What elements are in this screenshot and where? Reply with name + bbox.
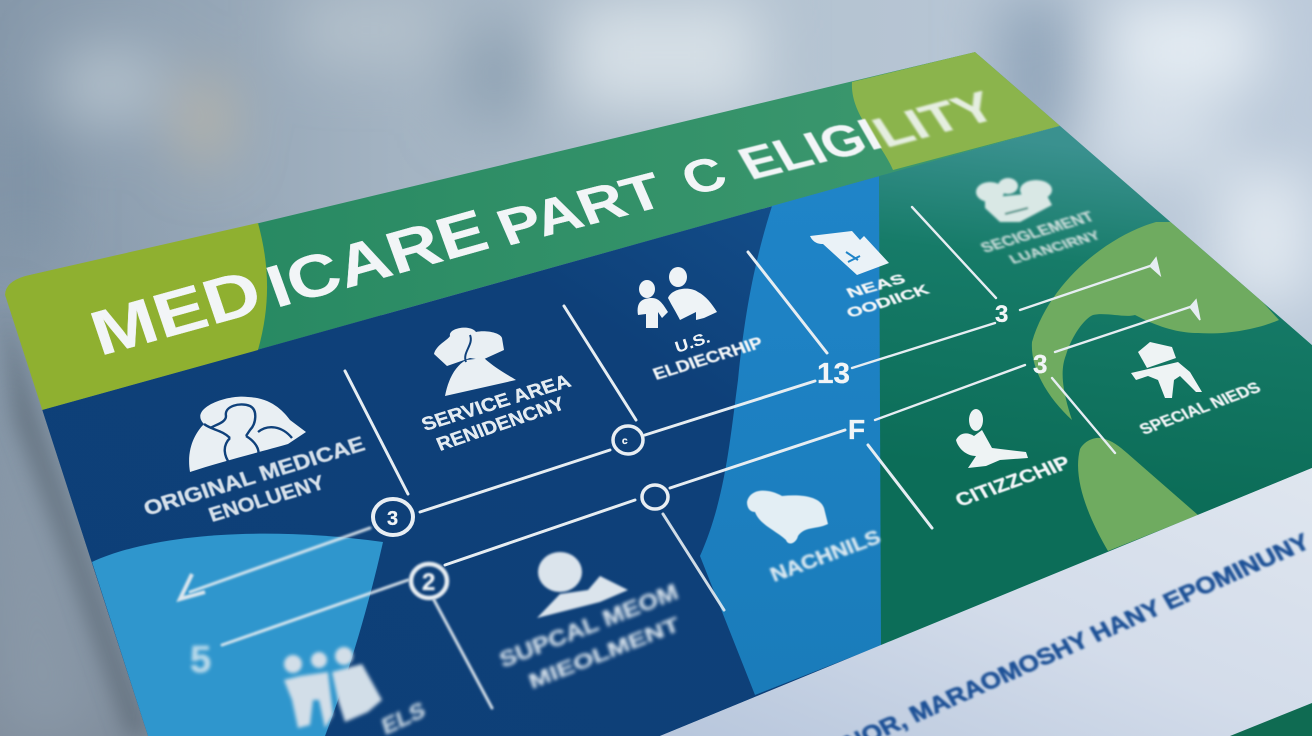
labels: SUPCAL MEOM xyxy=(496,579,681,673)
panel: green section xyxy=(879,125,1312,646)
labels: SPECIAL NIEDS xyxy=(1136,378,1264,438)
card shadow xyxy=(2,300,150,736)
labels: CITIZZCHIP xyxy=(952,453,1075,511)
icon: head and shoulders xyxy=(537,552,628,618)
grid lines xyxy=(190,207,1190,708)
icon: two people U.S. xyxy=(638,267,717,328)
panel: bottom white strip xyxy=(660,468,1312,736)
icon: group top right xyxy=(976,178,1052,222)
title: MED xyxy=(82,257,270,369)
icon: original medicare person xyxy=(189,397,306,472)
node numbers: 3 xyxy=(387,508,398,530)
panel: bright blue section xyxy=(700,176,882,695)
panel: lime header corner right xyxy=(852,52,1063,170)
labels: ENOLUENY xyxy=(206,472,328,527)
node numbers: 2 xyxy=(422,569,435,596)
panel: light green arc xyxy=(1032,222,1279,420)
arrow head xyxy=(180,574,205,599)
labels: RENIDENCNY xyxy=(434,394,568,456)
icon: special needs xyxy=(1131,342,1202,398)
labels: MIEOLMENT xyxy=(526,613,683,694)
labels: OODIICK xyxy=(844,281,932,321)
title xyxy=(82,82,1006,369)
panel: light blue shape xyxy=(92,534,383,736)
panel: light green lower blob xyxy=(1078,438,1198,551)
node numbers: 13 xyxy=(817,358,850,390)
title: C xyxy=(673,147,735,206)
icon: blue hands xyxy=(747,491,828,543)
node numbers: F xyxy=(848,414,865,445)
node numbers xyxy=(190,301,1047,681)
title: ICARE xyxy=(258,197,496,320)
labels: NEAS xyxy=(844,271,909,301)
labels: ELDIECRHIP xyxy=(650,333,766,384)
icon: service area person xyxy=(434,328,516,396)
labels: LUANCIRNY xyxy=(1006,227,1104,267)
panel: lime header corner left xyxy=(5,223,267,410)
labels: U.S. xyxy=(673,329,712,357)
labels: ORIGINAL MEDICAE xyxy=(141,433,368,521)
node numbers: c xyxy=(622,436,628,447)
title: ELIGI xyxy=(730,110,890,190)
labels xyxy=(141,208,1264,736)
panel: header band xyxy=(42,52,1063,410)
title: PART xyxy=(489,162,672,257)
line end caps xyxy=(1150,258,1200,320)
icon: document xyxy=(810,231,889,275)
bottom dark corner xyxy=(1230,703,1312,736)
node numbers: 5 xyxy=(190,639,211,681)
node numbers: 3 xyxy=(995,301,1008,328)
labels: NACHNILS xyxy=(767,526,884,587)
node numbers: 3 xyxy=(1033,349,1047,379)
labels: SECIGLEMENT xyxy=(977,208,1098,256)
node circles xyxy=(373,426,668,598)
icon: citizenship person xyxy=(956,409,1028,468)
panel: navy section xyxy=(42,176,882,736)
icon: two people bottom xyxy=(284,647,382,728)
labels: SERVICE AREA xyxy=(419,371,574,436)
title: LITY xyxy=(863,82,1006,156)
